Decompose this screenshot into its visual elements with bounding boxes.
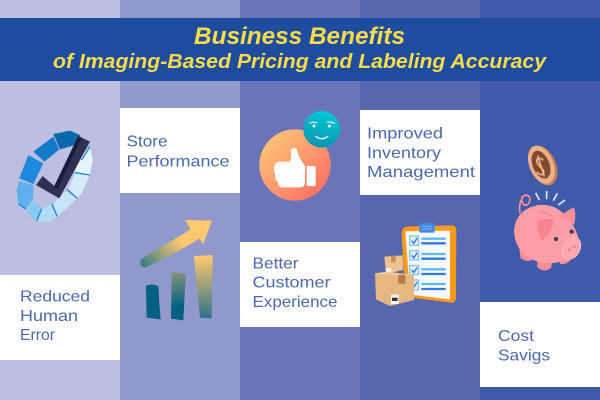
- panel: cost savings label: [480, 302, 600, 387]
- background column 3: [240, 0, 360, 400]
- icon: clipboard and boxes: [375, 223, 456, 306]
- piggy flap: [537, 219, 554, 241]
- panel: reduced human error label: [0, 275, 120, 360]
- piggy tail: [520, 195, 530, 213]
- piggy body: [514, 205, 580, 263]
- title line 1: Business Benefits: [194, 23, 405, 50]
- panel: better customer experience label: Customer: [252, 275, 331, 292]
- panel: reduced human error label: Reduced: [20, 288, 90, 306]
- icon: growth chart: [140, 220, 213, 320]
- piggy ear: [559, 207, 575, 225]
- large box: [375, 272, 414, 306]
- icon: coin: [523, 142, 563, 190]
- background column 2: [120, 0, 240, 400]
- background column 1: [0, 0, 120, 400]
- panel: cost savings label: Cost: [498, 328, 535, 345]
- panel: better customer experience label: Better: [252, 255, 299, 272]
- piggy snout: [559, 234, 584, 263]
- savings sparks: [536, 191, 565, 205]
- panel: cost savings label: Savigs: [498, 348, 550, 365]
- icon: piggy bank: [514, 191, 584, 270]
- panel: better customer experience label: Experience: [252, 294, 338, 311]
- panel: improved inventory management label: Inventory: [367, 145, 441, 162]
- panel: improved inventory management label: [360, 110, 480, 195]
- panel: store performance label: Performance: [126, 154, 230, 171]
- title line 2: of Imaging-Based Pricing and Labeling Accuracy: [53, 51, 547, 73]
- panel: reduced human error label: Error: [20, 327, 56, 344]
- panel: reduced human error label: Human: [20, 308, 78, 325]
- coin slot: [541, 211, 552, 216]
- title banner: [0, 18, 600, 81]
- panel: improved inventory management label: Improved: [367, 126, 443, 142]
- panel: better customer experience label: [240, 242, 360, 327]
- panel: store performance label: [120, 108, 240, 193]
- short bar: [146, 285, 161, 319]
- panel: store performance label: Store: [126, 134, 168, 151]
- panel: improved inventory management label: Management: [367, 164, 476, 181]
- background column 5: [480, 0, 600, 400]
- middle bar: [171, 272, 186, 320]
- background column 4: [360, 0, 480, 400]
- icon: check mark dial: [17, 131, 93, 222]
- tall bar: [194, 255, 213, 318]
- small box: [384, 255, 403, 274]
- growth arrow: [140, 220, 212, 268]
- icon: thumbs up with smiley: [259, 111, 340, 201]
- piggy legs: [519, 248, 570, 270]
